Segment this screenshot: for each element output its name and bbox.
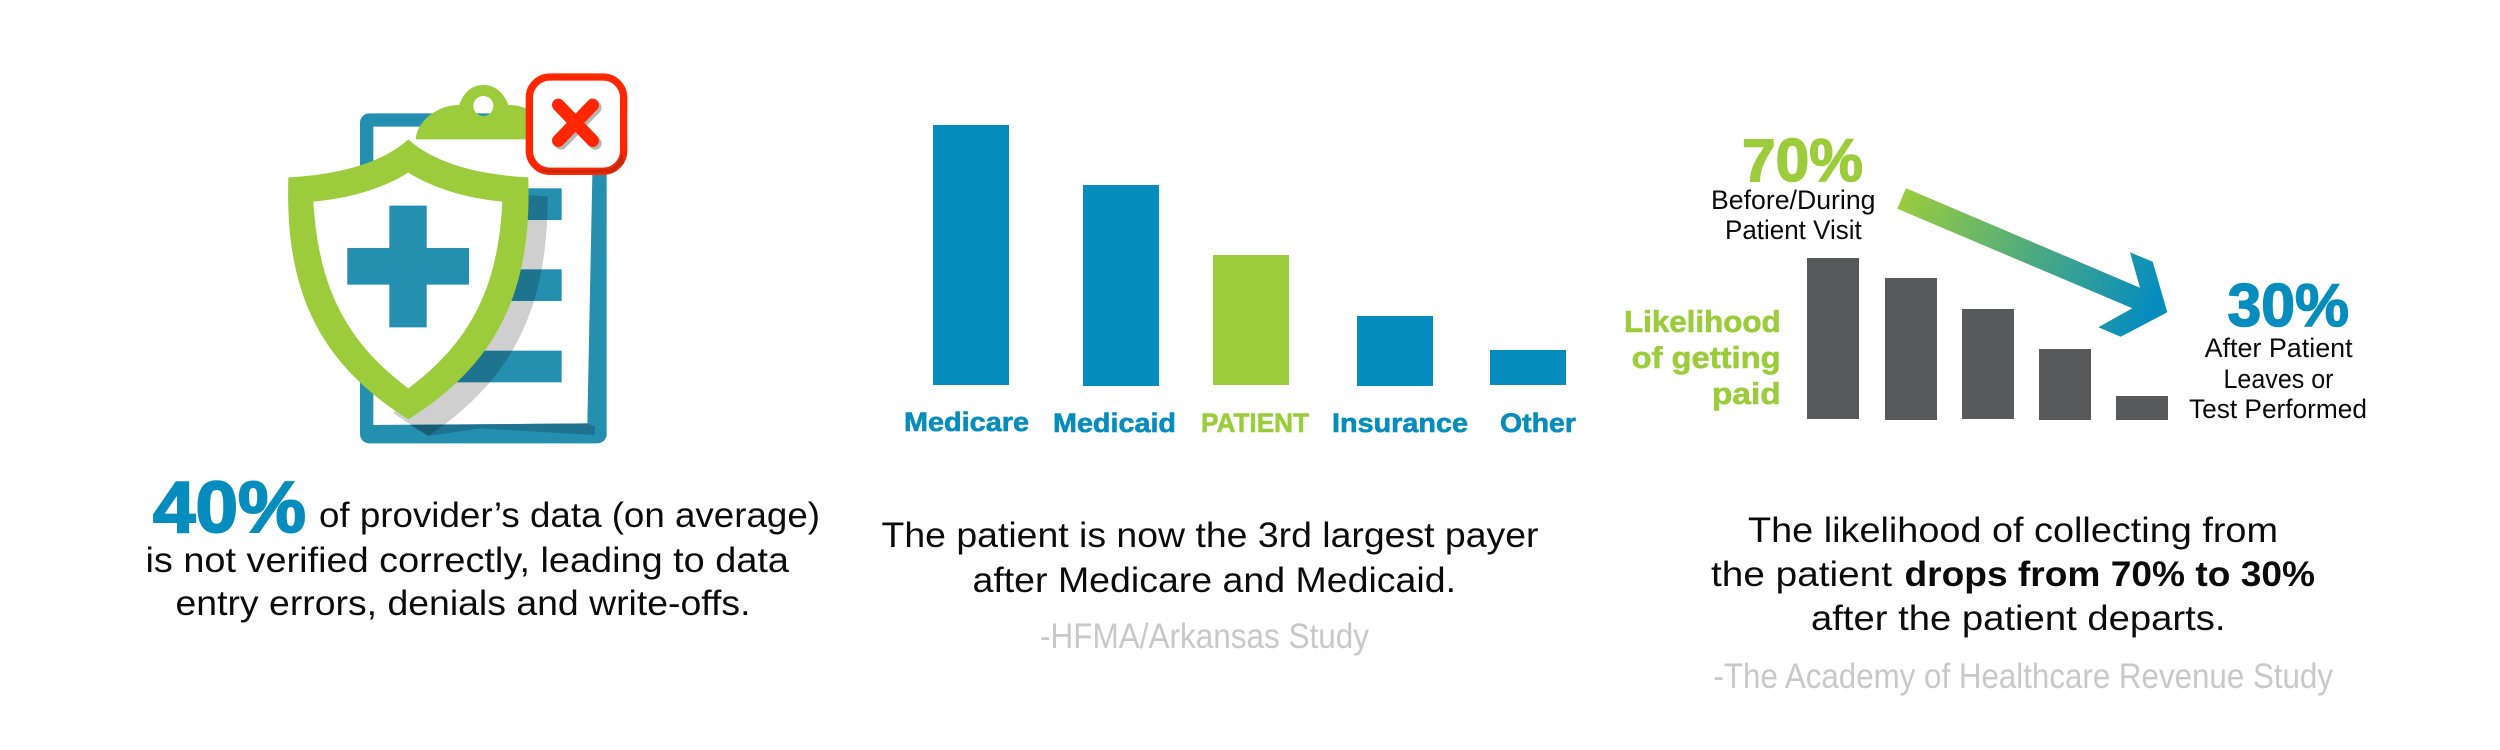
bar: Medicaid <box>1083 185 1159 386</box>
icon: clipboard paper <box>373 127 593 425</box>
stat: 40%: 40% <box>153 468 306 548</box>
bar: Insurance <box>1357 316 1433 386</box>
source: -The Academy of Healthcare Revenue Study <box>1714 657 2333 696</box>
label: before/during: Before/During <box>1711 185 1876 215</box>
text: line 1: The patient is now the 3rd largest payer <box>882 516 1539 555</box>
label: likelihood of getting paid <box>1624 304 1781 411</box>
panel: data verification <box>146 77 820 623</box>
text: line 3: after the patient departs. <box>1811 599 2226 638</box>
icon: shield <box>288 139 529 419</box>
panel: payer bar chart <box>882 125 1577 656</box>
label: likelihood of getting paid: of getting <box>1632 340 1781 375</box>
label: likelihood of getting paid: Likelihood <box>1624 304 1781 339</box>
text: line 3: entry errors, denials and write-offs. <box>176 584 750 623</box>
panel: likelihood of getting paid <box>1624 127 2367 696</box>
label: after patient: After Patient <box>2205 333 2353 363</box>
stat: 30%: 30% <box>2228 272 2349 339</box>
label: Medicaid: Medicaid <box>1053 408 1176 438</box>
text: line 1: The likelihood of collecting from <box>1748 511 2278 550</box>
label: Insurance: Insurance <box>1332 408 1468 438</box>
icon: clipboard with shield and red X <box>288 77 624 443</box>
text: line 2: is not verified correctly, leading to data <box>146 541 790 580</box>
label: Other: Other <box>1500 408 1577 438</box>
bar: Other <box>1490 350 1566 385</box>
icon: medical cross <box>347 206 469 327</box>
bar chart: declining likelihood <box>1807 258 2168 420</box>
text: line 2 <box>1711 555 2315 594</box>
label: test performed: Test Performed <box>2189 394 2367 424</box>
icon: paper shadow <box>410 423 595 436</box>
icon: clipboard board <box>360 113 607 443</box>
bar chart <box>933 125 1566 386</box>
label: PATIENT: PATIENT <box>1201 408 1309 438</box>
icon: text lines <box>450 188 562 382</box>
text: line 2: after Medicare and Medicaid. <box>972 561 1456 600</box>
arrow: declining trend <box>1897 188 2167 337</box>
icon: red X badge <box>529 77 624 173</box>
icon: shield shadow <box>393 195 548 436</box>
stat: 70%: 70% <box>1742 127 1863 194</box>
text: line 1: of provider’s data (on average) <box>319 496 820 535</box>
bar: Medicare <box>933 125 1009 385</box>
icon: shield inner <box>313 173 502 388</box>
label: patient visit: Patient Visit <box>1725 215 1862 245</box>
text: line 2: the patient <box>1711 555 1892 594</box>
source: -HFMA/Arkansas Study <box>1040 617 1369 656</box>
icon: clip <box>416 85 528 139</box>
label: Medicare: Medicare <box>904 407 1029 437</box>
text: line 2: drops from 70% to 30% <box>1904 555 2315 594</box>
label: leaves or: Leaves or <box>2224 364 2334 394</box>
label: likelihood of getting paid: paid <box>1712 376 1781 411</box>
bar: Patient <box>1213 255 1289 385</box>
